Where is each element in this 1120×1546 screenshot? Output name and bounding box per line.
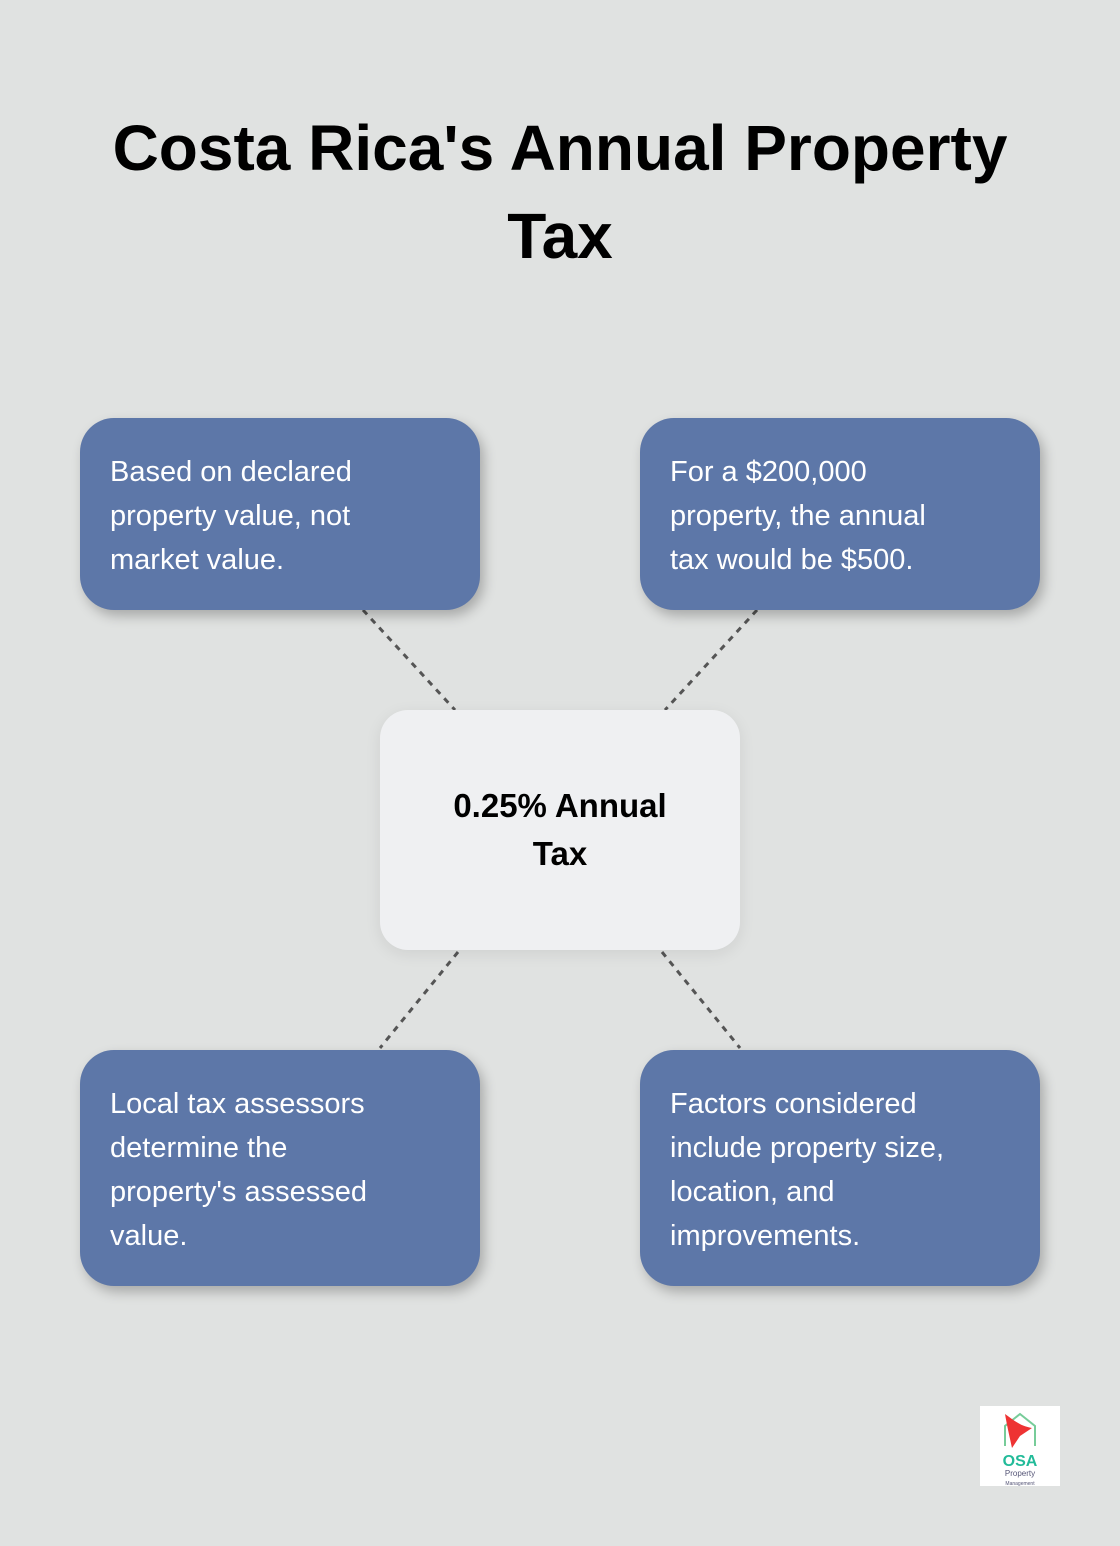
panel: bottom-left: Local tax assessors <box>110 1088 365 1120</box>
panel: bottom-right: include property size, <box>670 1132 944 1164</box>
center node: Tax <box>533 835 587 872</box>
center node <box>380 710 740 950</box>
panel: top-right: property, the annual <box>670 500 926 532</box>
panel: top-left: property value, not <box>110 500 350 532</box>
title: Tax <box>507 200 613 272</box>
panel: bottom-right: location, and <box>670 1176 834 1208</box>
panel: bottom-right: improvements. <box>670 1220 860 1252</box>
logo: Management <box>1005 1481 1035 1487</box>
panel: top-right <box>640 418 1040 610</box>
center node: 0.25% Annual <box>453 787 667 824</box>
panel: bottom-left <box>80 1050 480 1286</box>
panel: bottom-right: Factors considered <box>670 1088 917 1120</box>
panel: top-left: market value. <box>110 544 284 576</box>
title: Costa Rica's Annual Property <box>113 112 1007 184</box>
panel: top-right: tax would be $500. <box>670 544 913 576</box>
title <box>113 112 1008 272</box>
panel: top-right: For a $200,000 <box>670 456 867 488</box>
logo: Property <box>1005 1469 1035 1478</box>
logo <box>980 1406 1060 1486</box>
panel: top-left: Based on declared <box>110 456 352 488</box>
panel: top-left <box>80 418 480 610</box>
panel: bottom-left: property's assessed <box>110 1176 367 1208</box>
panel: bottom-left: determine the <box>110 1132 287 1164</box>
panel: bottom-right <box>640 1050 1040 1286</box>
logo: OSA <box>1003 1453 1037 1470</box>
panel: bottom-left: value. <box>110 1220 187 1252</box>
